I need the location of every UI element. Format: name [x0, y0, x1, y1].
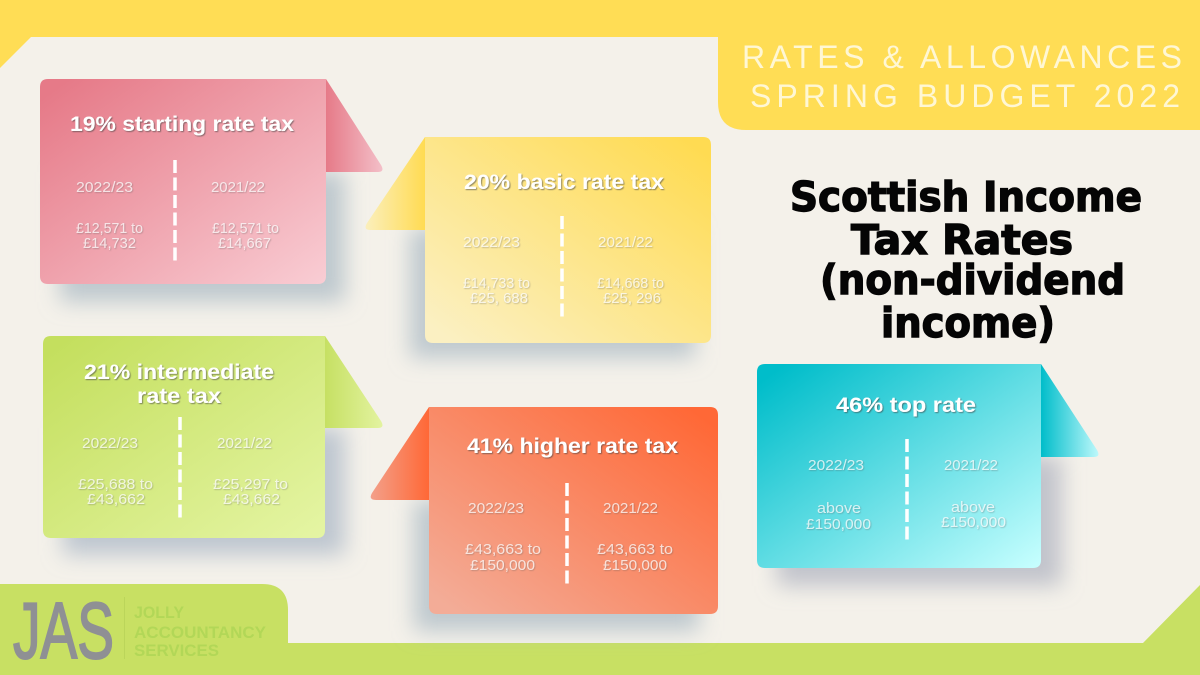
top yellow band [0, 0, 1200, 68]
column 2021/22: £43,663 to [597, 541, 673, 558]
column 2022/23 [78, 435, 153, 508]
column 2021/22: £14,668 to [597, 275, 664, 292]
column 2022/23 [463, 234, 530, 307]
column 2022/23: £150,000 [806, 516, 871, 533]
column 2022/23: £25, 688 [470, 290, 528, 307]
panel: 41% higher rate tax [371, 407, 718, 614]
column 2022/23: 2022/23 [82, 435, 138, 452]
column 2021/22 [213, 435, 288, 508]
header text [742, 39, 1182, 114]
column 2021/22: 2021/22 [944, 457, 998, 474]
card [43, 336, 325, 538]
heading: 41% higher rate tax [467, 435, 678, 458]
panel: 19% starting rate tax [40, 79, 382, 284]
company name: JOLLY [134, 603, 185, 622]
title [790, 173, 1142, 347]
column 2022/23: 2022/23 [463, 234, 520, 251]
column 2022/23: 2022/23 [808, 457, 864, 474]
header panel [718, 0, 1200, 130]
column 2022/23 [806, 457, 871, 533]
column 2021/22: 2021/22 [217, 435, 272, 452]
column 2021/22 [597, 500, 673, 574]
title: Scottish Income [790, 173, 1142, 221]
panel: 20% basic rate tax [366, 137, 711, 343]
panel: logo [0, 584, 288, 675]
divider [905, 439, 909, 541]
flap [325, 336, 382, 428]
column 2021/22: 2021/22 [598, 234, 653, 251]
column 2021/22: £25, 296 [603, 290, 661, 307]
title: (non-dividend [820, 256, 1125, 304]
column 2021/22: £14,667 [218, 235, 271, 252]
divider [178, 417, 182, 518]
flap [371, 407, 429, 500]
title: income) [881, 299, 1055, 347]
column 2022/23: £12,571 to [76, 220, 143, 237]
column 2022/23 [76, 179, 143, 252]
column 2021/22 [597, 234, 664, 307]
column 2021/22: 2021/22 [211, 179, 265, 196]
column 2022/23: 2022/23 [468, 500, 524, 517]
column 2022/23: £25,688 to [78, 476, 153, 493]
column 2022/23: £150,000 [470, 557, 535, 574]
flap [366, 137, 425, 230]
divider [173, 160, 177, 263]
column 2022/23: above [817, 500, 861, 517]
company name: ACCOUNTANCY [134, 623, 267, 642]
column 2022/23 [465, 500, 541, 574]
heading: 20% basic rate tax [464, 171, 664, 194]
heading: 21% intermediate [84, 361, 274, 384]
column 2021/22: 2021/22 [603, 500, 658, 517]
column 2021/22: £43,662 [223, 491, 280, 508]
heading: rate tax [137, 385, 221, 408]
column 2021/22: £25,297 to [213, 476, 288, 493]
bottom green band [0, 585, 1200, 675]
column 2021/22 [941, 457, 1006, 531]
card [425, 137, 711, 343]
column 2022/23: £14,733 to [463, 275, 530, 292]
logo mark: JAS: JAS [13, 586, 114, 675]
column 2021/22: £150,000 [603, 557, 667, 574]
column 2022/23: £14,732 [83, 235, 136, 252]
column 2022/23: £43,663 to [465, 541, 541, 558]
flap [326, 79, 382, 172]
company name: SERVICES [134, 641, 219, 660]
column 2021/22: £150,000 [941, 514, 1006, 531]
column 2021/22: above [951, 499, 995, 516]
flap [1041, 364, 1098, 457]
panel: 46% top rate [757, 364, 1098, 568]
column 2021/22 [211, 179, 279, 252]
heading: 19% starting rate tax [70, 113, 294, 136]
card [757, 364, 1041, 568]
heading: 46% top rate [836, 394, 976, 417]
title: Tax Rates [851, 216, 1073, 264]
heading [84, 361, 274, 408]
logo divider [124, 597, 125, 659]
card [429, 407, 718, 614]
card [40, 79, 326, 284]
divider [565, 483, 569, 584]
column 2021/22: £12,571 to [212, 220, 279, 237]
divider [560, 216, 564, 318]
header text: RATES & ALLOWANCES [742, 39, 1182, 75]
header text: SPRING BUDGET 2022 [750, 78, 1180, 114]
company name [134, 603, 267, 660]
column 2022/23: 2022/23 [76, 179, 133, 196]
panel: 21% intermediate rate tax [43, 336, 382, 538]
column 2022/23: £43,662 [87, 491, 145, 508]
